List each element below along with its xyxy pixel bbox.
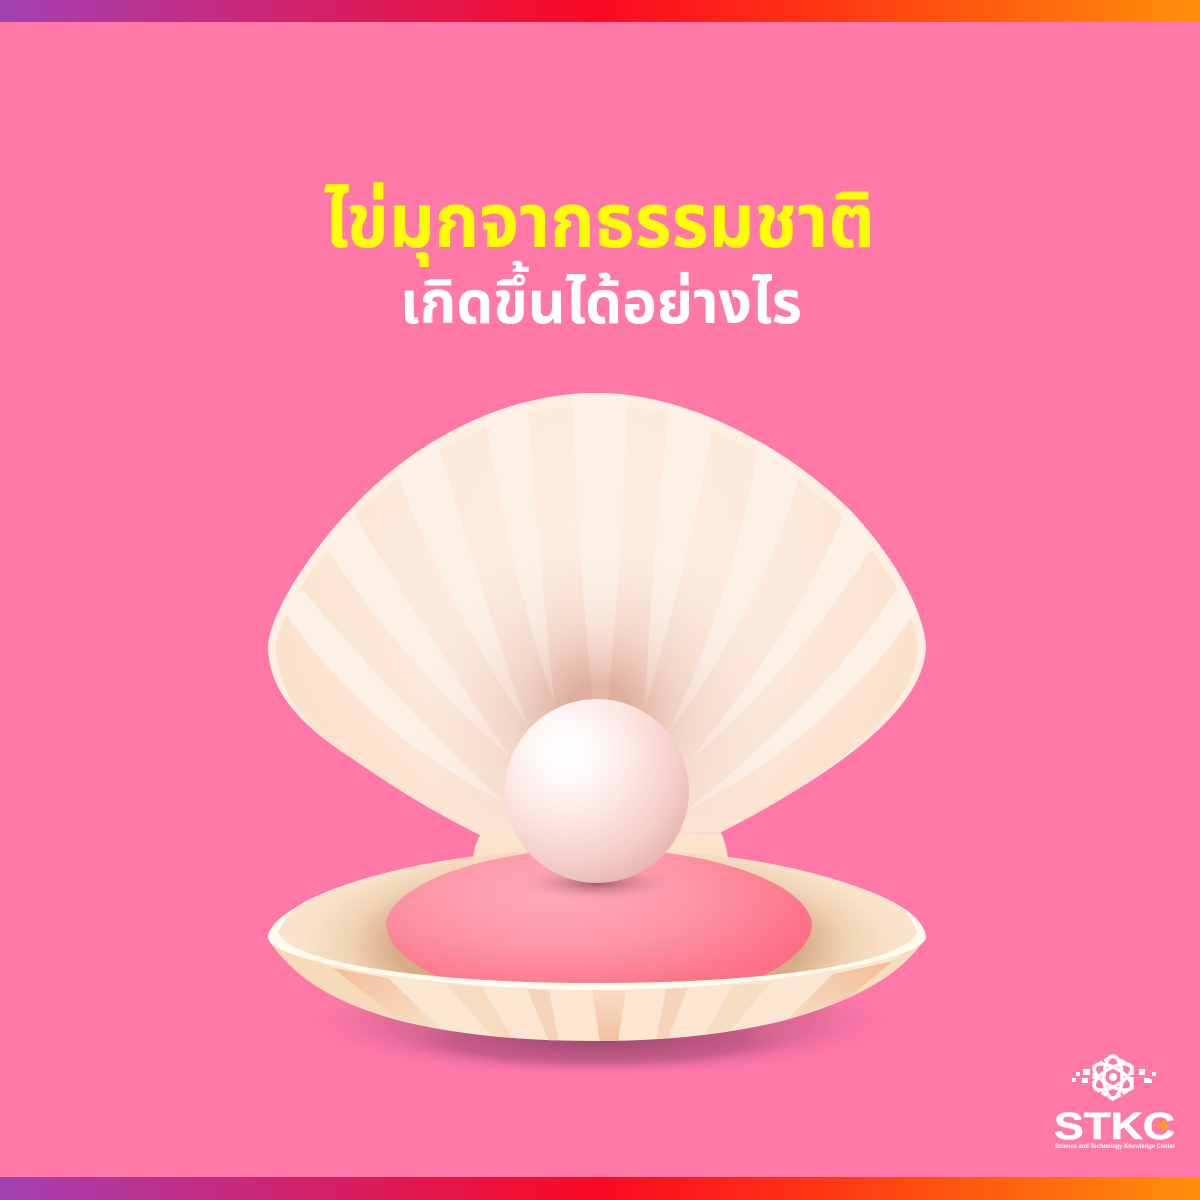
- shadow under shell: [280, 964, 920, 1080]
- title line 2: เกิดขึ้นได้อย่างไร: [400, 260, 802, 336]
- logo tagline: Science and Technology Knowledge Center: [1055, 1144, 1176, 1150]
- top gradient bar: [0, 0, 1200, 22]
- pearl shadow: [515, 865, 679, 901]
- lower shell rim: [268, 848, 926, 990]
- pink mantle: [386, 852, 812, 983]
- lower shell interior: [278, 848, 917, 983]
- shell hinge: [473, 815, 728, 860]
- logo: STKC: [1054, 1056, 1176, 1150]
- far left band: [270, 942, 396, 1019]
- logo orange dot: [1158, 1120, 1168, 1130]
- title: [324, 179, 875, 336]
- pearl: [505, 699, 689, 883]
- logo atom icon: [1090, 1056, 1136, 1099]
- title line 1: ไข่มุกจากธรรมชาติ: [324, 179, 875, 267]
- logo wordmark: STKC: [1054, 1106, 1175, 1148]
- lower shell bowl: [265, 935, 925, 1042]
- far right band: [848, 945, 920, 998]
- logo pixel squares: [1072, 1069, 1156, 1083]
- upper shell: [260, 390, 940, 840]
- bottom gradient bar: [0, 1177, 1200, 1200]
